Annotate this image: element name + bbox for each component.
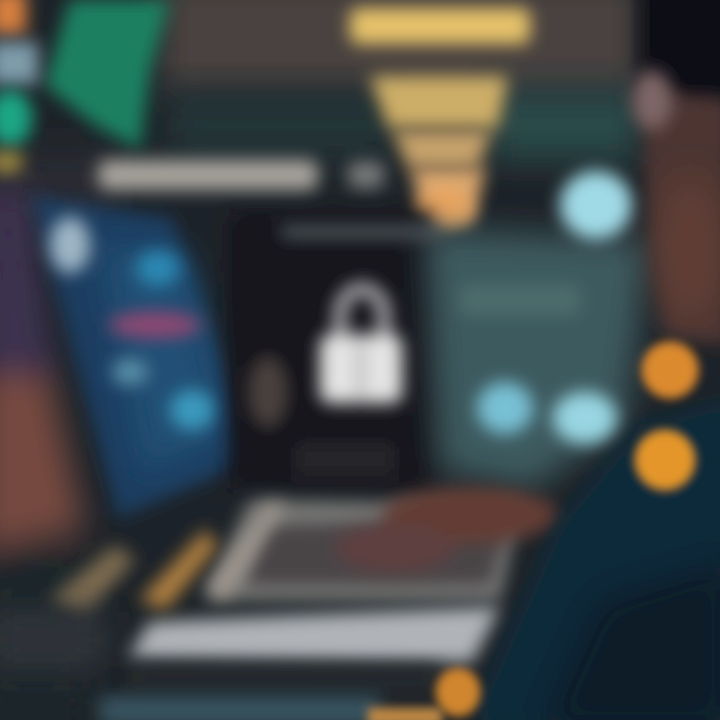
panel: laptop keyboard and desk — [0, 500, 520, 720]
panel: dark central lock screen — [228, 210, 433, 488]
icon: top-left green and colored shapes — [0, 0, 170, 173]
title: blurred heading band — [98, 160, 445, 238]
panel: hand on keyboard — [335, 487, 558, 572]
icon: orange badges — [368, 342, 698, 720]
panel: ceiling lights — [350, 8, 530, 228]
panel: person on right — [480, 0, 720, 720]
icon: padlock — [320, 289, 402, 403]
panel: laptop screen left — [32, 196, 254, 518]
panel: left purple and orange wall — [0, 190, 90, 720]
panel: right data screen — [425, 171, 650, 490]
